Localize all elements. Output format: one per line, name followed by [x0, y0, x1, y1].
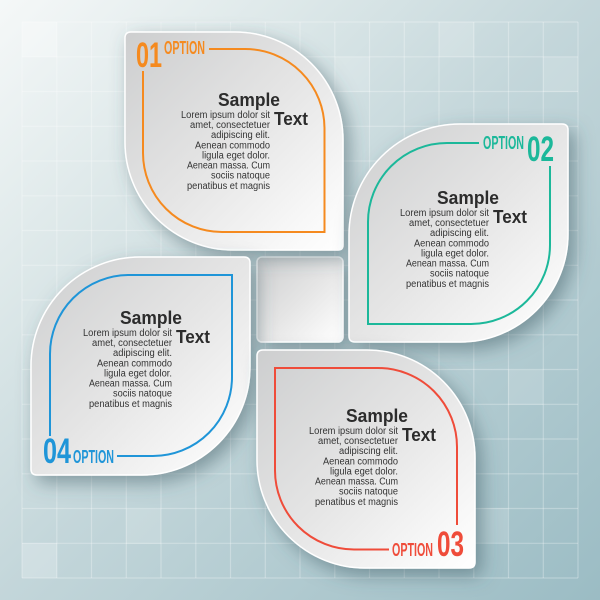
text block 04: Sample	[120, 308, 182, 328]
text block 04: Aenean massa. Cum	[89, 378, 172, 390]
text block 01: Aenean massa. Cum	[187, 160, 270, 172]
text block 03: Sample	[346, 406, 408, 426]
text block 01: amet, consectetuer	[190, 120, 271, 131]
text block 02: Aenean massa. Cum	[406, 258, 489, 270]
text block 04: sociis natoque	[113, 389, 172, 400]
label option: OPTION	[392, 540, 433, 560]
text block 01: Aenean commodo	[195, 140, 270, 151]
text block 01: sociis natoque	[211, 171, 270, 182]
card 03 shape	[257, 350, 475, 568]
card 02 outline	[368, 143, 550, 324]
text block 02: Sample	[437, 188, 499, 208]
text block 01: Sample	[218, 90, 280, 110]
text block 03: Lorem ipsum dolor sit	[309, 426, 398, 437]
text block 04: ligula eget dolor.	[104, 368, 172, 379]
text block 03: adipiscing elit.	[339, 446, 398, 457]
text block 02	[400, 188, 527, 290]
number 04: 04	[43, 432, 71, 471]
text block 01: Lorem ipsum dolor sit	[181, 110, 270, 121]
text block 04: amet, consectetuer	[92, 338, 173, 349]
panel: option 04	[31, 257, 250, 475]
card 04 outline	[50, 275, 232, 456]
text block 01: ligula eget dolor.	[202, 150, 270, 161]
text block 02: penatibus et magnis	[406, 279, 489, 290]
text block 01: adipiscing elit.	[211, 130, 270, 141]
text block 03: Aenean commodo	[323, 456, 398, 467]
card 03 outline	[275, 368, 457, 550]
text block 02: Aenean commodo	[414, 238, 489, 249]
text block 03: ligula eget dolor.	[330, 466, 398, 477]
text block 01: Text	[274, 109, 308, 129]
number 03: 03	[437, 525, 464, 564]
panel: option 03	[257, 350, 475, 568]
text block 01	[181, 90, 308, 192]
text block 02: Text	[493, 207, 527, 227]
text block 02: Lorem ipsum dolor sit	[400, 208, 489, 219]
text block 04: adipiscing elit.	[113, 348, 172, 359]
label option: OPTION	[483, 133, 524, 153]
text block 04: Aenean commodo	[97, 358, 172, 369]
text block 03: sociis natoque	[339, 487, 398, 498]
text block 03	[309, 406, 436, 508]
label option: OPTION	[164, 38, 205, 58]
text block 04: penatibus et magnis	[89, 399, 172, 410]
card 01 outline	[143, 49, 324, 232]
text block 02: amet, consectetuer	[409, 218, 490, 229]
text block 04	[83, 308, 210, 410]
panel: option 02	[349, 124, 568, 342]
text block 03: amet, consectetuer	[318, 436, 399, 447]
text block 02: sociis natoque	[430, 269, 489, 280]
panel: option 01	[125, 32, 343, 250]
text block 03: penatibus et magnis	[315, 497, 398, 508]
text block 03: Aenean massa. Cum	[315, 476, 398, 488]
number 02: 02	[527, 130, 554, 169]
number 01: 01	[136, 36, 162, 75]
text block 04: Text	[176, 327, 210, 347]
label option: OPTION	[73, 447, 114, 467]
text block 02: adipiscing elit.	[430, 228, 489, 239]
card 02 shape	[349, 124, 568, 342]
text block 01: penatibus et magnis	[187, 181, 270, 192]
text block 04: Lorem ipsum dolor sit	[83, 328, 172, 339]
text block 02: ligula eget dolor.	[421, 248, 489, 259]
centre square	[257, 257, 343, 342]
text block 03: Text	[402, 425, 436, 445]
card 01 shape	[125, 32, 343, 250]
card 04 shape	[31, 257, 250, 475]
